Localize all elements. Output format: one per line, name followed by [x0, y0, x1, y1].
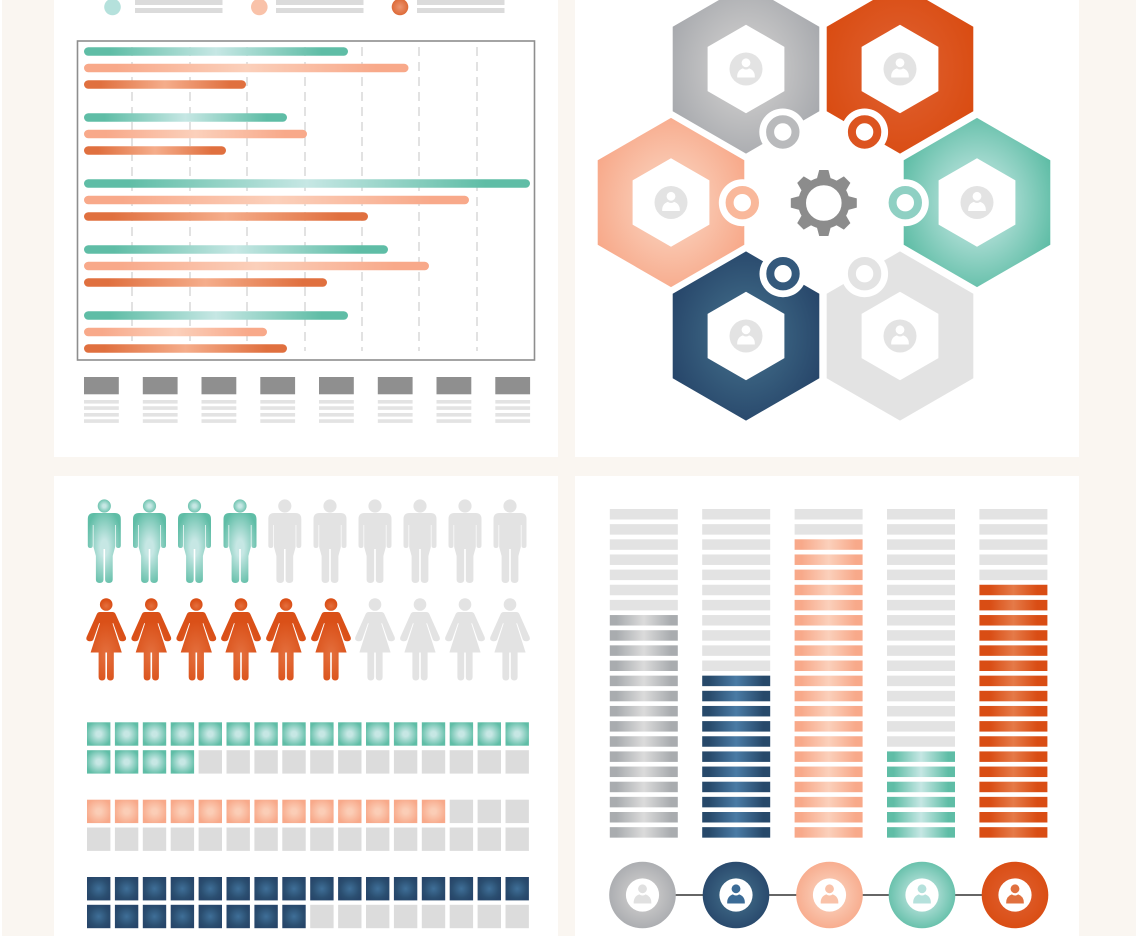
avatar: orange	[982, 862, 1048, 928]
bar group 3	[84, 179, 530, 221]
connector ring: light grey	[841, 250, 888, 297]
column 3: peach	[795, 509, 863, 838]
horizontal bar chart	[78, 41, 534, 360]
avatar: grey	[609, 862, 676, 928]
avatar: peach	[796, 862, 863, 928]
connector ring: grey	[759, 108, 806, 156]
square grid: teal	[87, 722, 529, 774]
panel: people and square pictograms	[54, 476, 558, 936]
bar group 4	[84, 245, 429, 287]
hexagon: grey	[673, 0, 819, 154]
column 5: orange	[979, 509, 1047, 838]
connector ring: orange	[841, 108, 888, 156]
hexagon: orange	[827, 0, 973, 154]
hexagon: peach	[598, 118, 744, 287]
bar group 2	[84, 113, 307, 155]
hexagon: teal	[904, 118, 1050, 287]
panel: hexagon cycle diagram	[575, 0, 1079, 457]
panel: bar chart	[54, 0, 558, 457]
panel: stacked column meters	[575, 476, 1079, 936]
square grid: peach	[87, 800, 529, 851]
avatar: navy	[703, 862, 769, 928]
bar group 1	[84, 47, 408, 89]
square grid: navy	[87, 877, 529, 928]
column 2: navy	[702, 509, 770, 838]
hexagon: navy	[673, 251, 819, 421]
connector ring: peach	[719, 179, 766, 226]
women pictogram row	[86, 598, 530, 680]
icon: gear	[791, 170, 857, 236]
avatar: teal	[889, 862, 955, 928]
column 1: grey	[610, 509, 678, 838]
hexagon: light grey	[827, 251, 973, 421]
column 4: teal	[887, 509, 955, 838]
connector ring: teal	[882, 179, 929, 226]
legend	[104, 0, 504, 15]
connector line	[643, 894, 1015, 896]
axis labels	[84, 377, 530, 423]
men pictogram row	[88, 499, 527, 583]
bar group 5	[84, 311, 348, 353]
connector ring: navy	[760, 250, 806, 297]
left edge strip	[0, 0, 2, 936]
